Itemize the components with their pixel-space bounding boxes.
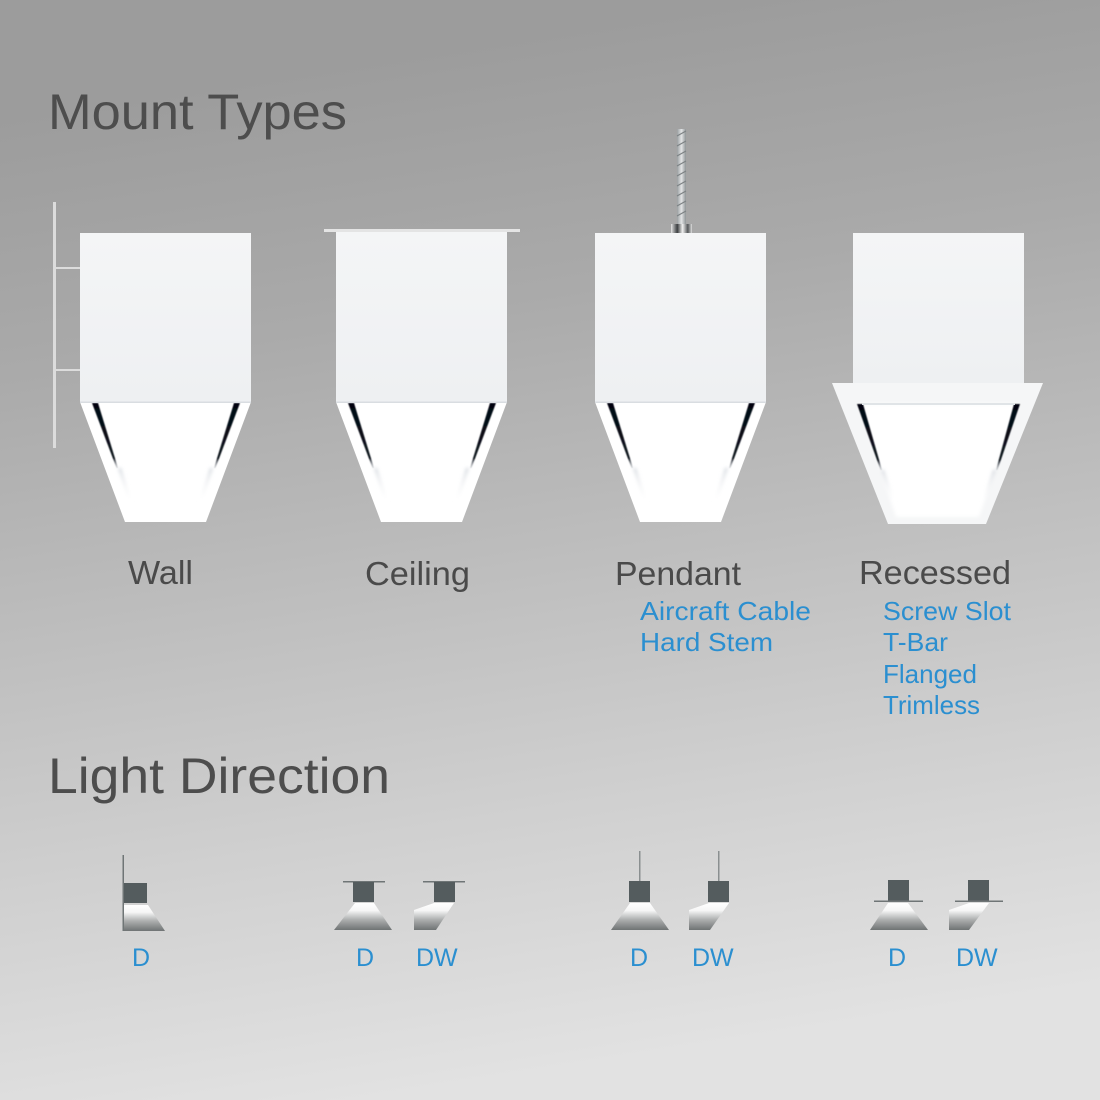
label: pendant DW: DW: [692, 944, 734, 972]
icon: pendant DW: [689, 851, 729, 930]
label: Pendant with options: Aircraft Cable: [640, 596, 811, 626]
label: ceiling D: D: [356, 944, 374, 972]
title: Mount Types: Mount Types: [48, 84, 347, 140]
label: Recessed with options: Flanged: [883, 659, 977, 689]
icon: recessed DW: [949, 880, 1003, 930]
label: Recessed with options: Trimless: [883, 690, 980, 720]
label: Pendant with options: [615, 555, 811, 657]
label: Wall: Wall: [128, 554, 193, 591]
label: pendant D: D: [630, 944, 648, 972]
label: Pendant with options: Pendant: [615, 555, 741, 592]
fixture: pendant mount: [595, 129, 766, 522]
label: Recessed with options: T-Bar: [883, 627, 948, 657]
label: wall D: D: [132, 944, 150, 972]
fixture: wall mount: [53, 202, 251, 522]
icon: pendant D: [611, 851, 669, 930]
label: ceiling DW: DW: [416, 944, 458, 972]
icon: wall D: [122, 855, 165, 931]
title: Light Direction: Light Direction: [48, 748, 390, 804]
icon: ceiling D: [334, 881, 392, 930]
icon: recessed D: [870, 880, 928, 930]
label: recessed D: D: [888, 944, 906, 972]
label: Ceiling: Ceiling: [365, 555, 470, 592]
fixture: recessed mount: [832, 233, 1043, 524]
label: Recessed with options: [859, 554, 1012, 720]
label: Recessed with options: Screw Slot: [883, 596, 1012, 626]
label: Pendant with options: Hard Stem: [640, 627, 773, 657]
label: Recessed with options: Recessed: [859, 554, 1011, 591]
icon: ceiling DW: [414, 881, 465, 930]
label: recessed DW: DW: [956, 944, 998, 972]
fixture: ceiling mount: [324, 229, 520, 522]
